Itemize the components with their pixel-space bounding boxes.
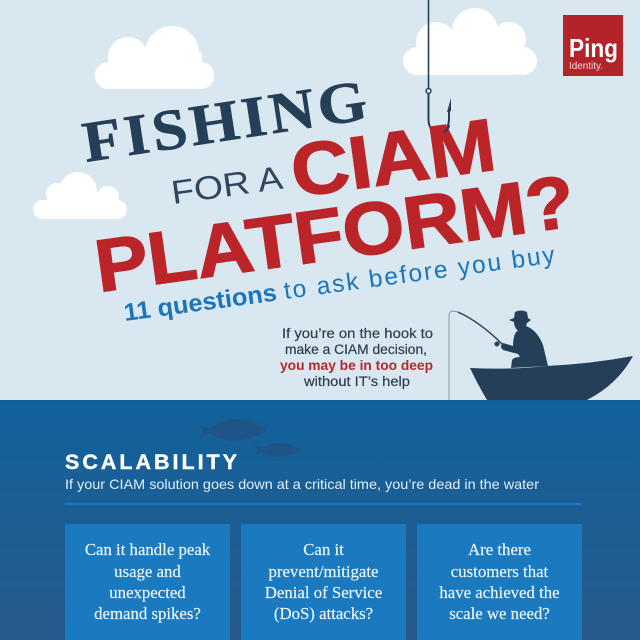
callout text: without IT’s help: [303, 374, 410, 389]
subtitle: to ask before you buy: [282, 242, 557, 305]
logo: Ping Identity: Identity.: [569, 60, 603, 72]
callout text: [280, 326, 433, 389]
panel: question 2: (DoS) attacks?: [274, 604, 373, 623]
panel: question 2: Denial of Service: [265, 583, 382, 602]
sky background: [0, 0, 640, 400]
panel: question 3: Are there: [468, 540, 531, 559]
title: PLATFORM?: PLATFORM?: [90, 159, 580, 308]
panel: question 2: [241, 524, 406, 640]
logo: Ping Identity: Ping: [569, 33, 618, 63]
callout text: If you’re on the hook to: [282, 326, 433, 341]
panel: question 3: scale we need?: [449, 604, 550, 623]
callout text: make a CIAM decision,: [285, 342, 427, 357]
section description: If your CIAM solution goes down at a critical time, you’re dead in the water: [65, 476, 539, 492]
title: FOR A: FOR A: [169, 159, 285, 211]
panel: question 1: unexpected: [109, 583, 186, 602]
cloud: top left: [95, 26, 214, 89]
panel: question 1: usage and: [114, 562, 181, 581]
icon: fishing hook and line: [426, 0, 451, 133]
logo: Ping Identity: [563, 15, 623, 76]
hook tip over title: [443, 125, 449, 132]
panel: question 2: prevent/mitigate: [269, 562, 378, 581]
subtitle: [122, 242, 557, 327]
icon: fish silhouettes: [197, 419, 301, 457]
cloud: top right: [403, 8, 537, 75]
callout text: you may be in too deep: [280, 358, 433, 373]
panel: question 3: [417, 524, 582, 640]
panel: question 2: Can it: [303, 540, 344, 559]
icon: fisherman in boat: [449, 310, 633, 400]
title: FISHING: FISHING: [78, 68, 375, 175]
subtitle: 11 questions: [122, 280, 278, 327]
panel: question 1: [65, 524, 230, 640]
panel: question 3: customers that: [451, 562, 549, 581]
heading: SCALABILITY: SCALABILITY: [65, 450, 237, 474]
panel: question 1: Can it handle peak: [85, 540, 211, 559]
cloud: left: [33, 172, 127, 219]
water background: [0, 400, 640, 640]
title: CIAM: CIAM: [286, 103, 500, 213]
panel: question 3: have achieved the: [439, 583, 560, 602]
panel: question 1: demand spikes?: [94, 604, 201, 623]
